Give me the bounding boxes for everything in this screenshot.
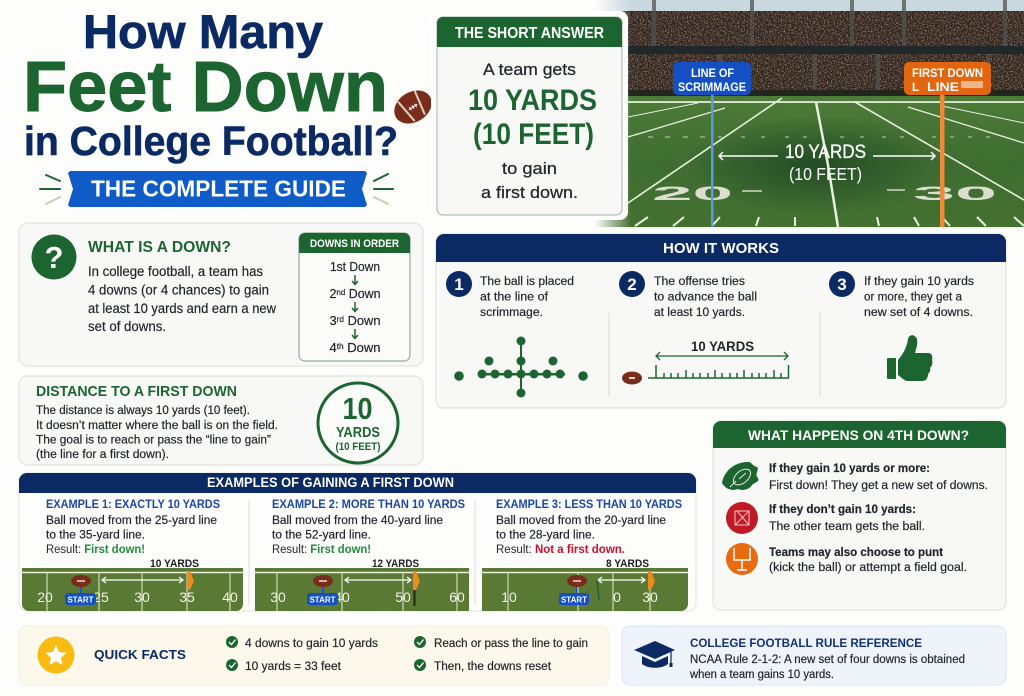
icon: thumbs up <box>887 335 932 381</box>
step 2: The offense tries <box>654 276 745 288</box>
distance arrow on field: (10 FEET) <box>789 164 862 184</box>
fact list: Reach or pass the line to gain <box>434 638 588 650</box>
panel: examples of gaining a first down <box>19 473 696 611</box>
decorative rays <box>40 174 393 204</box>
title <box>23 5 398 164</box>
step 3: 3 <box>837 275 847 294</box>
badge: 10 yards <box>318 383 398 463</box>
heading: COLLEGE FOOTBALL RULE REFERENCE <box>690 636 922 650</box>
step 1: 1 <box>454 275 464 294</box>
body text: The distance is always 10 yards (10 feet). <box>36 405 250 417</box>
ruler diagram: 10 yards <box>622 338 789 384</box>
example 3: EXAMPLE 3: LESS THAN 10 YARDS <box>496 499 682 511</box>
field strip 3 <box>482 568 688 611</box>
example 3: Result: Not a first down. <box>496 544 625 556</box>
badge: 10 yards: (10 FEET) <box>336 441 381 453</box>
field strip 3: 30 <box>642 589 658 605</box>
step 3: If they gain 10 yards <box>864 276 974 288</box>
fact list: 10 yards = 33 feet <box>245 661 342 673</box>
badge: 10 yards: 10 <box>342 391 372 426</box>
text: outcomes: If they gain 10 yards or more: <box>769 463 930 475</box>
panel: rule reference <box>622 626 1006 685</box>
example 3 <box>482 499 688 611</box>
label: first down line: L <box>912 82 919 94</box>
fact list <box>226 636 588 673</box>
downs in order: th <box>337 342 344 351</box>
example 1: Ball moved from the 25-yard line <box>46 515 217 527</box>
example 1: Result: First down! <box>46 544 145 556</box>
step 1 <box>446 271 574 319</box>
field strip 2: START <box>309 596 336 604</box>
badge: 10 yards: YARDS <box>336 424 380 441</box>
downs in order: nd <box>336 288 345 297</box>
title: in College Football? <box>24 118 398 164</box>
panel: the short answer: to gain <box>502 159 557 178</box>
panel: distance to a first down <box>19 376 423 465</box>
example 2: 12 YARDS <box>372 558 419 570</box>
field strip 1: 35 <box>179 589 195 605</box>
panel: the short answer: a first down. <box>481 183 578 202</box>
field strip 1: START <box>67 596 94 604</box>
icon: goal post <box>726 543 758 575</box>
text: outcomes: If they don’t gain 10 yards: <box>769 504 916 516</box>
field strip 2: 30 <box>270 589 286 605</box>
field strip 2: 50 <box>395 589 411 605</box>
field strip 1 <box>22 568 243 611</box>
label: first down line: LINE <box>927 82 959 94</box>
label: line of scrimmage <box>673 62 751 227</box>
step 1: The ball is placed <box>480 276 574 288</box>
subtitle banner <box>68 171 367 207</box>
example 1: EXAMPLE 1: EXACTLY 10 YARDS <box>46 499 220 511</box>
distance arrow on field: 10 YARDS <box>785 142 866 163</box>
panel: what is a down <box>19 223 423 366</box>
example 3: 8 YARDS <box>606 558 649 570</box>
field strip 1: 20 <box>37 589 53 605</box>
panel: the short answer: 10 YARDS <box>468 84 597 117</box>
body text: The goal is to reach or pass the “line to gain” <box>36 434 271 446</box>
text: outcomes: First down! They get a new set of downs. <box>769 480 988 492</box>
subtitle banner: THE COMPLETE GUIDE <box>91 176 346 202</box>
field strip 3: START <box>561 596 587 604</box>
example 1: 10 YARDS <box>150 558 199 570</box>
downs in order: 2 <box>330 287 336 301</box>
step 2: 2 <box>627 275 637 294</box>
step 2: at least 10 yards. <box>654 307 745 319</box>
downs in order: rd <box>337 315 344 324</box>
body text: It doesn’t matter where the ball is on the field. <box>36 420 278 432</box>
example 1: to the 35-yard line. <box>46 530 145 542</box>
example 2: Ball moved from the 40-yard line <box>272 515 443 527</box>
heading: QUICK FACTS <box>94 647 186 662</box>
example 2 <box>255 499 469 611</box>
icon: small football <box>622 372 642 384</box>
stadium photo: 30 <box>913 184 997 205</box>
field strip 2: 60 <box>449 589 465 605</box>
stadium photo: 20 <box>652 184 733 205</box>
fact list: 4 downs to gain 10 yards <box>245 638 378 650</box>
step 3: new set of 4 downs. <box>864 307 973 319</box>
body text <box>88 264 276 334</box>
title: Feet Down <box>23 48 388 127</box>
step 2 <box>619 271 757 319</box>
panel: how it works <box>436 234 1006 408</box>
label: line of scrimmage: LINE OF <box>691 68 734 80</box>
icon: question mark: ? <box>45 240 63 275</box>
field strip 3: 10 <box>501 589 517 605</box>
text: outcomes: Teams may also choose to punt <box>769 547 943 559</box>
panel: quick facts <box>19 626 609 685</box>
text: outcomes: The other team gets the ball. <box>769 521 925 533</box>
body text: at least 10 yards and earn a new <box>88 301 276 316</box>
body text: In college football, a team has <box>88 264 263 279</box>
label: first down line: FIRST DOWN <box>912 68 983 80</box>
formation diagram <box>454 336 588 398</box>
step 1: scrimmage. <box>480 307 543 319</box>
example 2: EXAMPLE 2: MORE THAN 10 YARDS <box>272 499 465 511</box>
icon: green football <box>722 462 758 490</box>
field strip 1: 25 <box>93 589 109 605</box>
field strip 3: 0 <box>613 589 621 605</box>
ruler diagram: 10 yards: 10 YARDS <box>691 338 754 354</box>
example 3: Ball moved from the 20-yard line <box>496 515 666 527</box>
downs in order: Down <box>344 314 381 328</box>
icon: star <box>38 636 74 674</box>
panel: the short answer: (10 FEET) <box>473 118 594 151</box>
example 3: to the 28-yard line. <box>496 530 595 542</box>
downs in order: Down <box>345 287 381 301</box>
field strip 2 <box>255 568 469 611</box>
downs in order: DOWNS IN ORDER <box>310 238 399 250</box>
body text <box>689 654 965 681</box>
body text <box>36 405 278 461</box>
stadium photo <box>595 0 1024 230</box>
step 3 <box>829 271 974 319</box>
panel: what happens on 4th down: WHAT HAPPENS ON 4TH DOWN? <box>748 427 969 443</box>
heading: WHAT IS A DOWN? <box>88 239 231 256</box>
panel: examples of gaining a first down: EXAMPLES OF GAINING A FIRST DOWN <box>207 475 454 490</box>
body text: NCAA Rule 2-1-2: A new set of four downs is obtained <box>690 654 965 666</box>
text: outcomes: (kick the ball) or attempt a field goal. <box>769 562 967 574</box>
icon: graduation cap <box>634 641 675 668</box>
body text: 4 downs (or 4 chances) to gain <box>88 282 269 298</box>
step 1: at the line of <box>480 292 549 304</box>
icon: football <box>388 84 438 130</box>
icon: red no gain <box>726 502 758 534</box>
panel: the short answer <box>431 11 628 220</box>
label: first down line <box>904 62 991 227</box>
step 3: or more, they get a <box>864 292 963 304</box>
panel: how it works: HOW IT WORKS <box>663 241 779 257</box>
example 2: to the 52-yard line. <box>272 530 371 542</box>
step 2: to advance the ball <box>654 292 757 304</box>
downs in order: 3 <box>330 314 336 328</box>
fact list: Then, the downs reset <box>434 661 552 673</box>
downs in order: Down <box>344 341 381 355</box>
downs in order: 4 <box>330 341 336 355</box>
body text: set of downs. <box>88 319 166 334</box>
example 1 <box>22 499 243 611</box>
field strip 1: 40 <box>222 589 238 605</box>
distance arrow on field <box>719 142 935 184</box>
body text: (the line for a first down). <box>36 449 169 461</box>
text: outcomes <box>769 463 988 574</box>
panel: the short answer: THE SHORT ANSWER <box>455 25 604 42</box>
downs in order <box>299 233 410 361</box>
heading: DISTANCE TO A FIRST DOWN <box>36 383 237 400</box>
icon: question mark <box>32 234 76 280</box>
downs in order: 1st Down <box>330 260 380 274</box>
field strip 1: 30 <box>134 589 150 605</box>
field strip 2: 40 <box>334 589 350 605</box>
label: line of scrimmage: SCRIMMAGE <box>678 82 746 94</box>
title: How Many <box>83 5 323 58</box>
panel: what happens on 4th down <box>713 421 1006 610</box>
body text: when a team gains 10 yards. <box>689 669 834 681</box>
panel: the short answer: A team gets <box>483 60 576 79</box>
example 2: Result: First down! <box>272 544 371 556</box>
